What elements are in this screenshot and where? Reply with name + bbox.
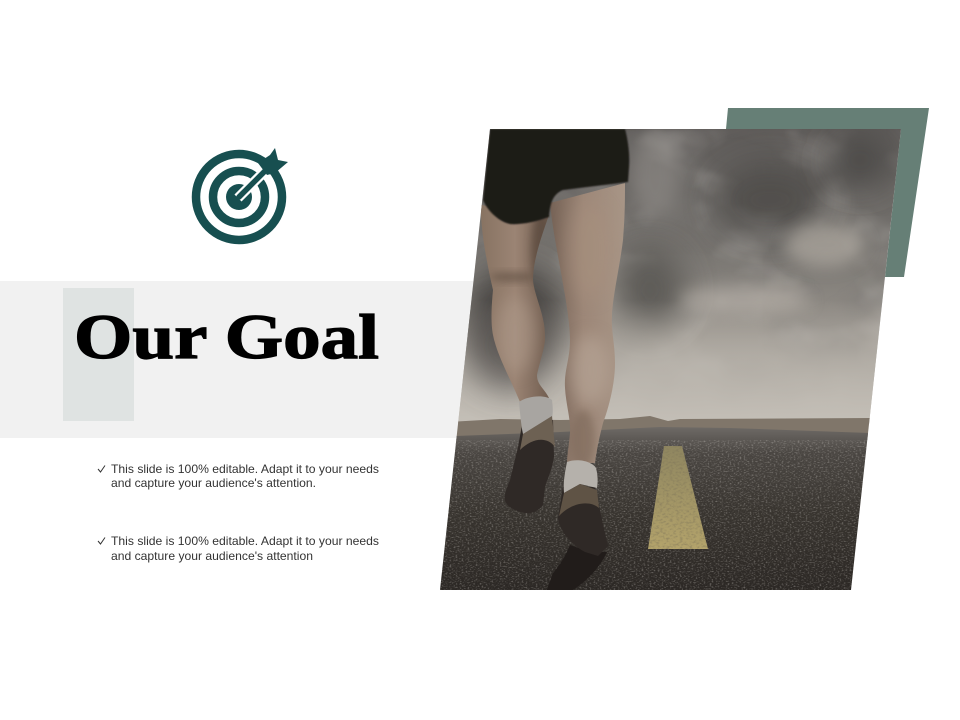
black shorts	[483, 129, 629, 224]
yellow road stripe	[645, 446, 710, 549]
icon: target with arrow	[196, 148, 288, 240]
bullet 2: and capture your audience's attention	[111, 549, 313, 563]
photo: runner on road	[430, 129, 910, 600]
bullet 1: and capture your audience's attention.	[111, 476, 316, 490]
right shoe	[545, 460, 608, 596]
bullet 2: This slide is 100% editable. Adapt it to your needs	[111, 534, 379, 548]
pale accent block behind title	[63, 288, 134, 421]
left shoe	[505, 396, 555, 513]
bullet 2	[98, 534, 379, 563]
checklist items	[98, 462, 379, 563]
right leg	[550, 183, 625, 463]
green offset parallelogram	[726, 108, 929, 277]
left leg	[481, 205, 549, 402]
bullet 1: This slide is 100% editable. Adapt it to your needs	[111, 462, 379, 476]
distant horizon	[430, 416, 870, 445]
road surface	[430, 427, 870, 600]
sky with clouds	[430, 129, 910, 424]
title: Our Goal	[74, 302, 379, 372]
grey title band	[0, 281, 480, 438]
bullet 1	[98, 462, 379, 490]
